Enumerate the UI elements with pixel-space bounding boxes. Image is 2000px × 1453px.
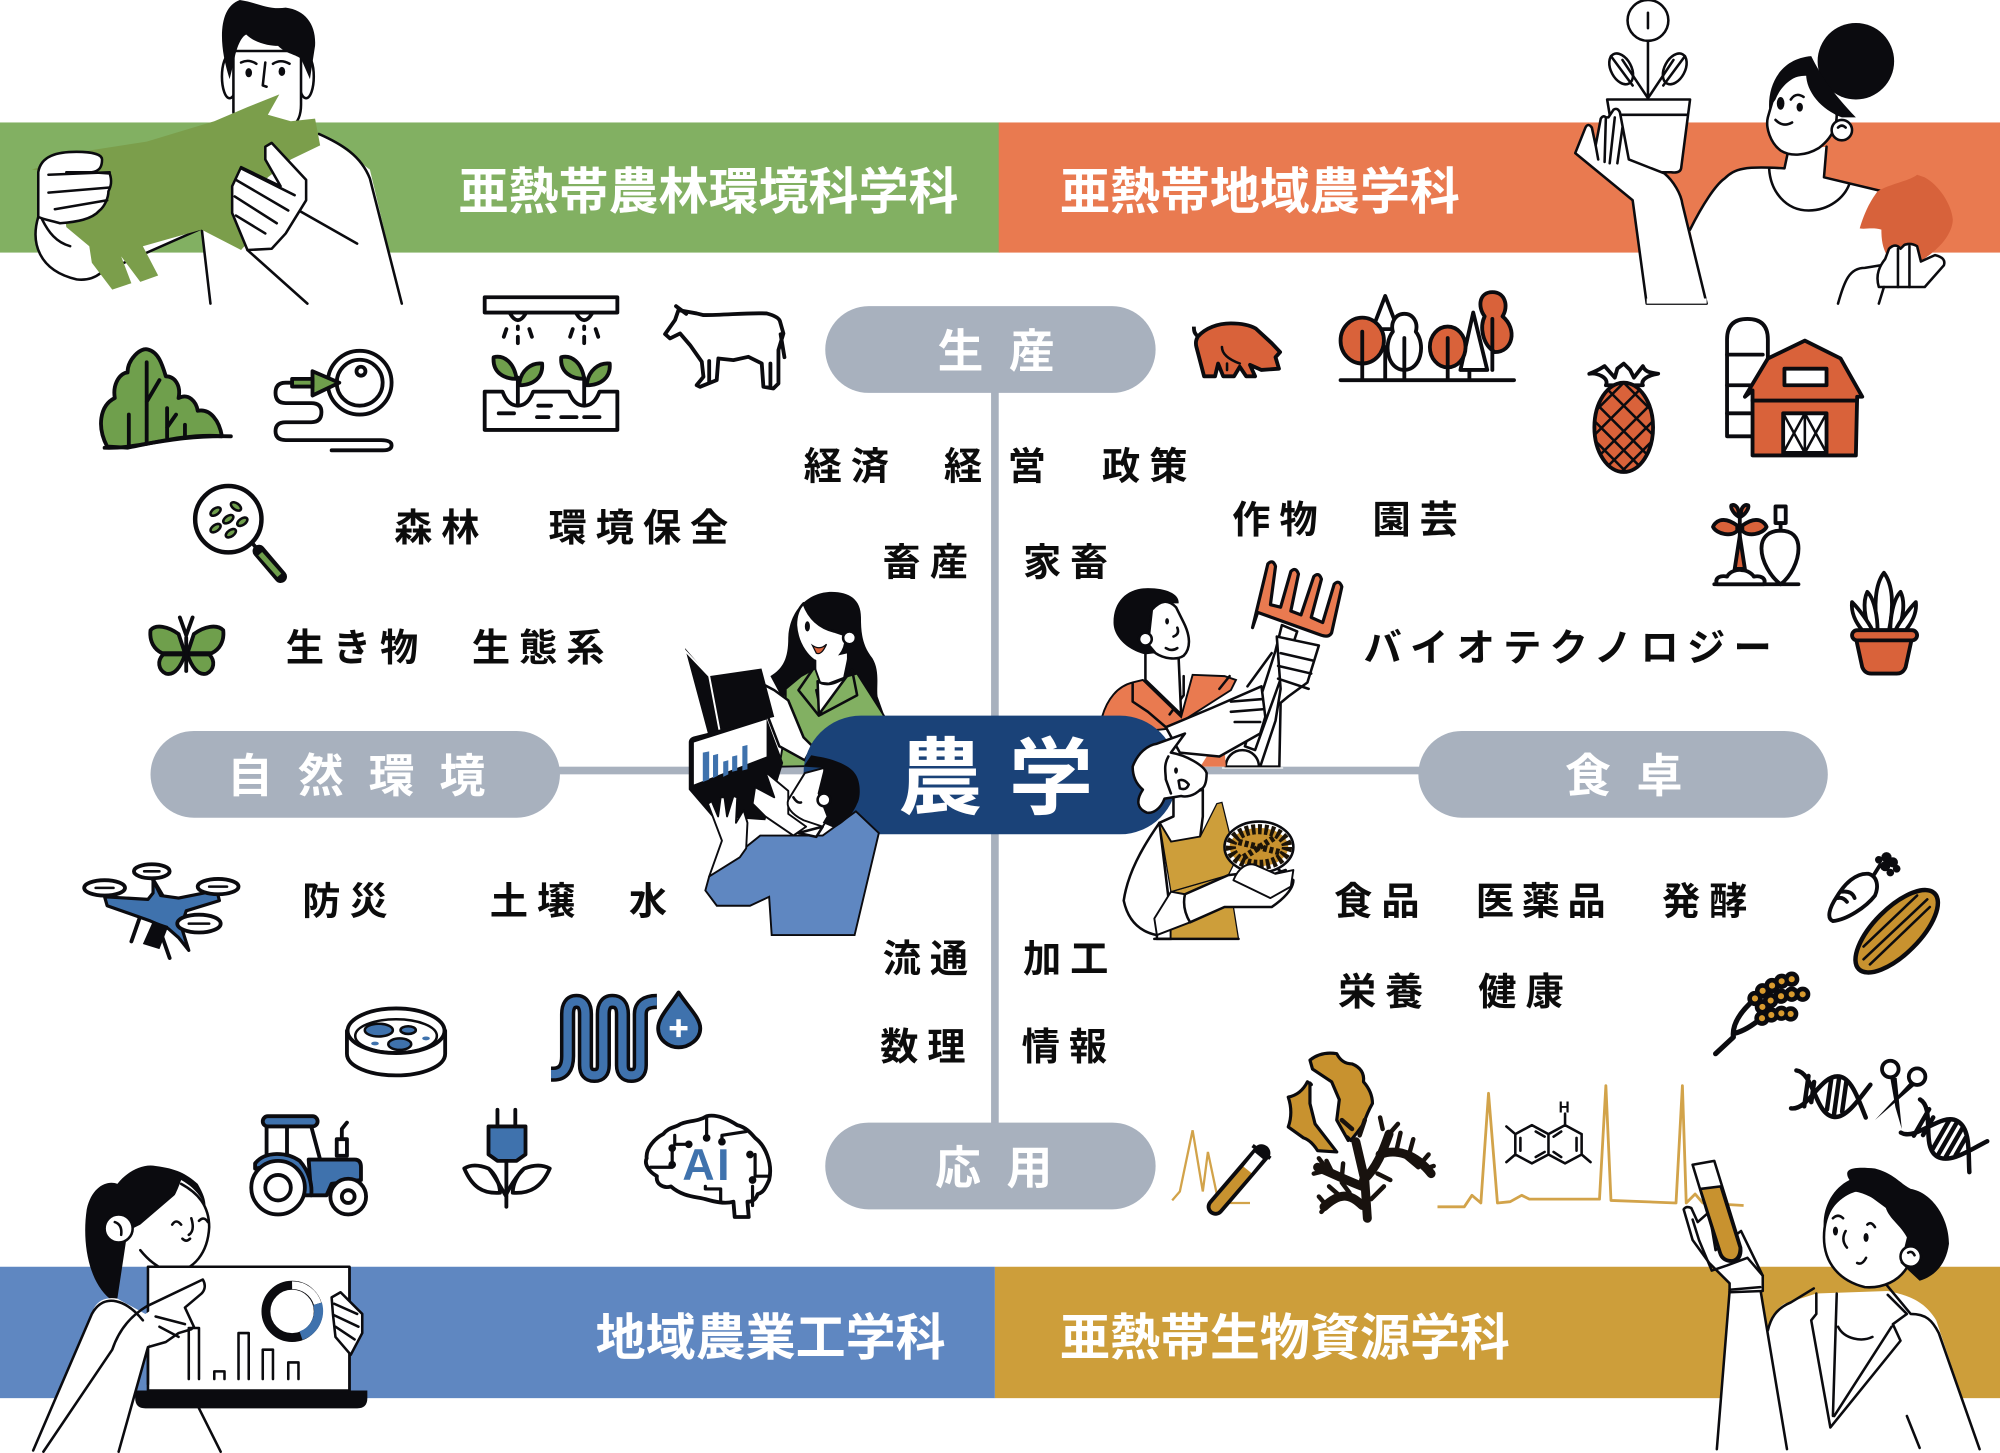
icon: AI brain: AI bbox=[682, 1141, 732, 1190]
heading: 亜熱帯農林環境科学科: 亜熱帯農林環境科学科 bbox=[459, 164, 959, 220]
terms: 園芸: 園芸 bbox=[1372, 499, 1467, 542]
icon: bitter melon bbox=[1843, 877, 1951, 985]
terms: 畜産: 畜産 bbox=[883, 541, 977, 584]
figure: woman in green shirt bbox=[685, 592, 884, 767]
terms: 森林: 森林 bbox=[394, 507, 488, 550]
terms: 環境保全: 環境保全 bbox=[548, 507, 737, 550]
figure: cook with bowl bbox=[1124, 734, 1293, 939]
terms: 加工: 加工 bbox=[1023, 938, 1117, 981]
icon: DNA strand left bbox=[1791, 1070, 1871, 1121]
terms: 作物: 作物 bbox=[1232, 499, 1326, 542]
pill: 生産 bbox=[825, 306, 1156, 393]
icon: small spectrum with test tube bbox=[1172, 1130, 1270, 1207]
chart: NMR spectrum bbox=[1438, 1086, 1744, 1207]
icon: pineapple bbox=[1587, 362, 1660, 474]
icon: tractor bbox=[251, 1116, 366, 1214]
icon: trees bbox=[1341, 292, 1514, 380]
figure: farmer with pitchfork bbox=[1102, 562, 1342, 768]
central pill: 農学: 農学 bbox=[898, 732, 1120, 826]
figure: man holding pig bbox=[32, 0, 402, 304]
band: green department bbox=[0, 122, 1000, 253]
icon: cow bbox=[665, 306, 784, 388]
icon: plug with leaves bbox=[464, 1110, 550, 1207]
band: gold department bbox=[995, 1267, 2000, 1398]
icon: drone bbox=[84, 864, 239, 958]
figure: woman with potted plant and mango bbox=[1575, 0, 1953, 304]
icon: potted plant bbox=[1852, 573, 1917, 674]
terms: 情報: 情報 bbox=[1022, 1026, 1116, 1069]
terms: 発酵: 発酵 bbox=[1662, 881, 1756, 924]
pill: 食卓 bbox=[1418, 731, 1828, 818]
terms: 生き物: 生き物 bbox=[286, 627, 427, 670]
terms: バイオテクノロジー: バイオテクノロジー bbox=[1364, 627, 1780, 670]
terms: 政策: 政策 bbox=[1102, 446, 1196, 489]
terms: 水: 水 bbox=[629, 881, 676, 924]
pill: 応用: 応用 bbox=[935, 1142, 1078, 1194]
icon: forest bbox=[101, 349, 231, 448]
icon: scissors bbox=[1875, 1061, 1925, 1129]
woman head bbox=[1818, 23, 1894, 100]
terms: 健康: 健康 bbox=[1478, 971, 1573, 1014]
band: orange department bbox=[999, 122, 2000, 253]
pill: 食卓: 食卓 bbox=[1565, 750, 1708, 802]
mango bbox=[1860, 175, 1953, 262]
icon: pig bbox=[1194, 323, 1280, 376]
icon: petri dish bbox=[347, 1008, 445, 1075]
icon: seaweed bbox=[1288, 1053, 1434, 1218]
icon: barn and silo bbox=[1727, 319, 1862, 455]
heading: 亜熱帯生物資源学科: 亜熱帯生物資源学科 bbox=[1060, 1310, 1510, 1366]
terms: 栄養: 栄養 bbox=[1338, 971, 1432, 1014]
heading: 地域農業工学科: 地域農業工学科 bbox=[596, 1310, 946, 1366]
terms: 土壌: 土壌 bbox=[490, 881, 584, 924]
figure: man in blue with tablet bbox=[689, 718, 879, 935]
terms: 防災: 防災 bbox=[302, 881, 397, 924]
pitchfork bbox=[1253, 562, 1342, 636]
figure: woman with laptop bbox=[33, 1165, 367, 1452]
terms: 数理: 数理 bbox=[880, 1026, 974, 1069]
test tube bbox=[1693, 1161, 1741, 1262]
figure: scientist with test tube bbox=[1684, 1161, 1980, 1449]
icon: AI brain bbox=[646, 1116, 770, 1217]
open book bbox=[685, 648, 774, 734]
terms: 医薬品: 医薬品 bbox=[1476, 881, 1613, 924]
terms: 家畜: 家畜 bbox=[1023, 541, 1117, 584]
terms: 生態系: 生態系 bbox=[472, 627, 613, 670]
icon: DNA strand right bbox=[1900, 1099, 1988, 1174]
plant bbox=[1628, 0, 1668, 41]
terms: 流通: 流通 bbox=[883, 938, 977, 981]
icon: carrot bbox=[1829, 852, 1901, 921]
tablet bbox=[689, 718, 783, 820]
pill: 生産: 生産 bbox=[938, 325, 1080, 377]
pig silhouette bbox=[32, 94, 320, 290]
icon: water pipe and drop bbox=[551, 992, 700, 1075]
icon: butterfly bbox=[150, 617, 223, 674]
pill: 自然環境: 自然環境 bbox=[227, 750, 510, 802]
pill: 応用 bbox=[825, 1123, 1156, 1209]
icon: microinjection cell bbox=[276, 351, 392, 450]
icon: magnifier with seeds bbox=[195, 486, 281, 577]
heading: 亜熱帯地域農学科: 亜熱帯地域農学科 bbox=[1060, 164, 1460, 220]
icon: hydroponics bbox=[485, 297, 617, 430]
terms: 経営: 経営 bbox=[944, 446, 1071, 489]
icon: sprout and trowel bbox=[1713, 505, 1798, 584]
icon: grain bbox=[1716, 972, 1810, 1054]
axis lines bbox=[548, 383, 1429, 1135]
terms: 食品: 食品 bbox=[1334, 881, 1429, 924]
band: blue department bbox=[0, 1267, 995, 1398]
icon: molecule bbox=[1506, 1099, 1591, 1163]
central pill: 農学 bbox=[804, 716, 1177, 834]
head bbox=[1824, 1189, 1911, 1287]
terms: 経済: 経済 bbox=[804, 446, 898, 489]
pill: 自然環境 bbox=[151, 731, 560, 818]
icon: molecule: H bbox=[1559, 1099, 1570, 1116]
